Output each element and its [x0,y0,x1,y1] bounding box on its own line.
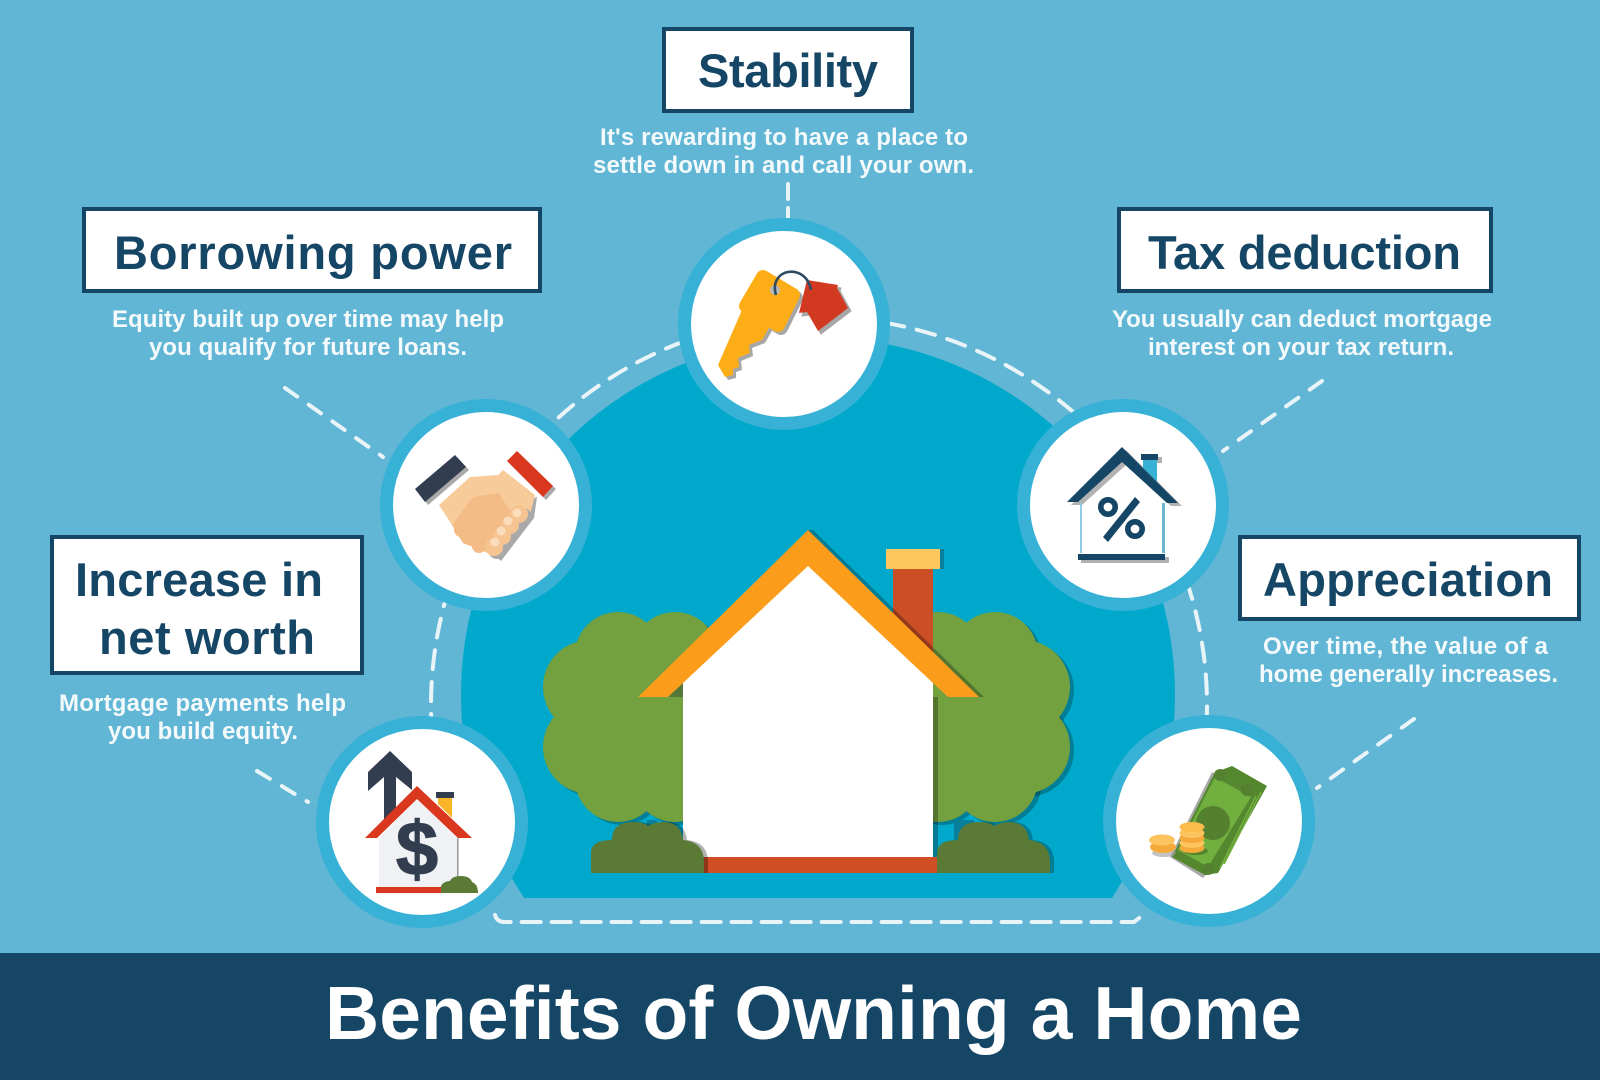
tree trunks [647,820,974,844]
dashed connector arc [257,184,1414,922]
panel: tax deduction [1112,209,1492,361]
heading: Appreciation [1263,553,1553,606]
heading: net worth [99,611,315,664]
description: Over time, the value of a [1263,633,1549,660]
circle: stability [684,224,884,424]
description: you build equity. [108,718,298,745]
chimney [886,549,944,659]
dome backdrop [461,337,1175,898]
panel: borrowing power [84,209,540,361]
description [1112,306,1492,361]
circle: borrowing power [386,406,586,604]
heading: Borrowing power [114,226,512,279]
description: home generally increases. [1259,661,1558,688]
bushes [591,822,1054,873]
house wall [683,560,938,857]
tree right [895,612,1074,825]
circle: tax deduction [1024,406,1222,604]
circle: appreciation [1110,722,1308,920]
description [112,306,504,361]
icon: house with percent sign [1067,447,1182,563]
icon: key with house tag [718,272,851,380]
description: settle down in and call your own. [593,152,974,179]
house base [704,857,937,873]
heading [75,553,323,664]
heading box [84,209,540,291]
icon: cash and coins [1149,766,1267,878]
roof [638,530,984,697]
description: you qualify for future loans. [149,334,467,361]
heading: Stability [698,44,878,97]
icon: house with dollar and up arrow: $ [396,807,438,892]
description [1259,633,1558,688]
heading box [664,29,912,111]
description: It's rewarding to have a place to [600,124,968,151]
icon: handshake [415,451,556,561]
heading box [1240,537,1579,619]
panel: appreciation [1240,537,1579,688]
tree left [543,612,722,825]
footer band [0,953,1600,1080]
central house illustration [543,530,1074,873]
panel: stability [593,29,974,179]
description: interest on your tax return. [1148,334,1454,361]
heading box [52,537,362,673]
title: Benefits of Owning a Home [325,971,1302,1055]
description [59,690,346,745]
description: Mortgage payments help [59,690,346,717]
description [593,124,974,179]
circle: increase in net worth [322,722,522,922]
heading: Tax deduction [1148,226,1461,279]
icon: house with dollar and up arrow [365,751,478,893]
panel: increase in net worth [52,537,362,745]
heading: Increase in [75,553,323,606]
heading box [1119,209,1491,291]
description: Equity built up over time may help [112,306,504,333]
description: You usually can deduct mortgage [1112,306,1492,333]
